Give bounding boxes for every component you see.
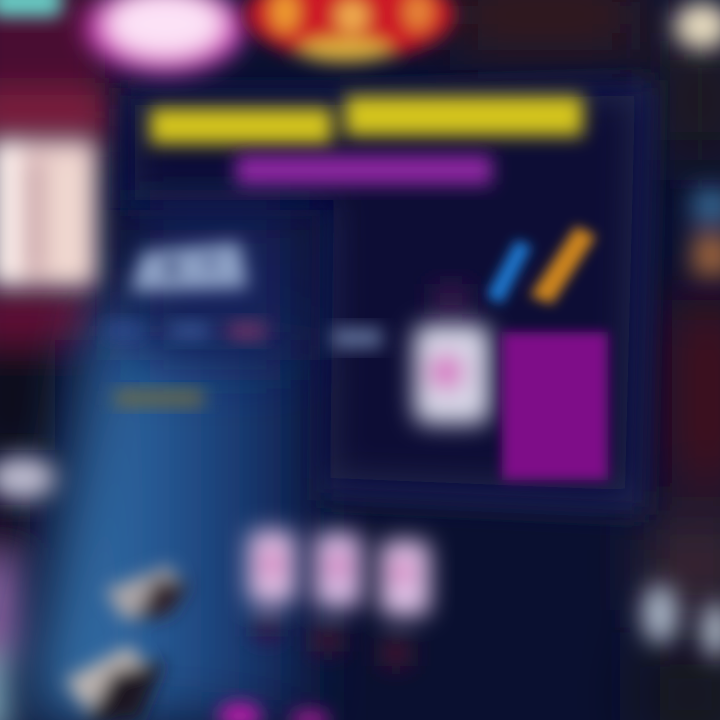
small bottle cap — [432, 284, 470, 314]
bottle two — [314, 532, 362, 652]
app icons blue and orange — [486, 226, 596, 304]
panel upper-left tint — [130, 210, 300, 360]
magenta glow at bottom — [218, 702, 330, 720]
bottle icon — [414, 324, 490, 424]
background: right wall — [450, 0, 720, 720]
pills lower left — [65, 565, 190, 720]
title — [150, 96, 583, 144]
left white glowing panel — [0, 138, 98, 288]
three bottle icons — [248, 530, 430, 666]
subtitle bar — [236, 155, 492, 185]
small white blob at left — [0, 456, 56, 500]
gold caption — [114, 390, 204, 406]
teal accent at top left — [0, 0, 62, 17]
main panel edge — [120, 80, 655, 515]
stat label right — [332, 328, 382, 348]
red and yellow neon sign — [246, 0, 454, 62]
bottle three — [380, 540, 430, 666]
big stat — [130, 242, 248, 292]
main dark panel — [135, 95, 635, 490]
magenta white glow at top — [85, 0, 245, 74]
background: left neon wall — [0, 0, 115, 720]
purple card — [502, 332, 608, 480]
lower left blue panel — [30, 300, 310, 720]
bottle one — [248, 530, 296, 638]
stat labels row — [105, 322, 266, 340]
cream lamp at top right — [674, 2, 720, 50]
right white blobs — [642, 584, 720, 658]
